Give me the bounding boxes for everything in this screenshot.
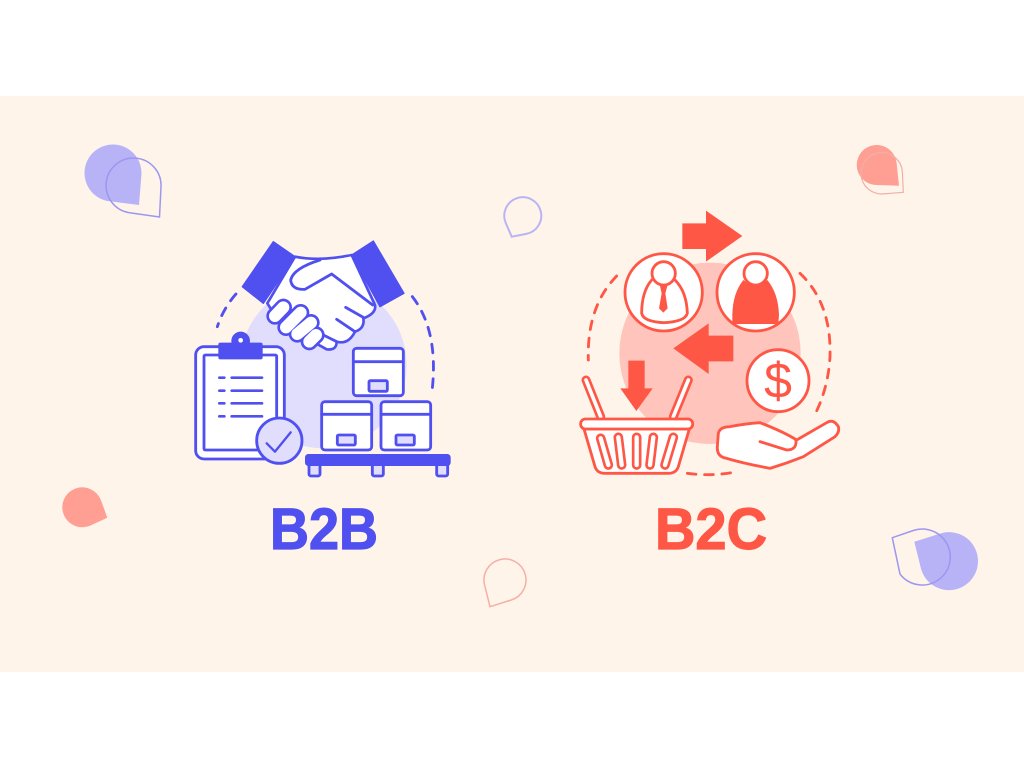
panel: B2B illustration bbox=[196, 241, 451, 476]
arrow: right bbox=[682, 211, 742, 262]
decorative drop: left bbox=[62, 487, 107, 527]
arrow: left bbox=[673, 323, 733, 374]
decorative drop: top centre bbox=[504, 197, 541, 237]
background circle bbox=[240, 282, 407, 448]
panel: B2C illustration bbox=[581, 211, 839, 475]
background band bbox=[0, 96, 1024, 672]
heading: B2C: B2C bbox=[655, 497, 767, 562]
background circle bbox=[619, 263, 801, 444]
icon: open hand bbox=[717, 421, 839, 468]
icon: dollar coin bbox=[747, 350, 809, 412]
icon: consumer bbox=[717, 254, 794, 331]
icon: basket bbox=[581, 380, 693, 473]
icon: bottom right box bbox=[381, 402, 431, 450]
dashed arcs bbox=[217, 294, 433, 388]
icon: check badge bbox=[257, 418, 302, 463]
icon: business person bbox=[625, 254, 702, 331]
heading: B2B: B2B bbox=[270, 497, 378, 562]
dashed arcs bbox=[588, 273, 830, 475]
icon: dollar coin: $ bbox=[764, 353, 792, 409]
decorative drops: bottom right bbox=[892, 529, 978, 590]
decorative drops: top left bbox=[84, 145, 161, 217]
decorative drops: top right bbox=[857, 145, 903, 194]
icon: top box bbox=[353, 348, 403, 396]
icon: pallet bbox=[305, 454, 451, 476]
icon: bottom left box bbox=[322, 402, 372, 450]
icon: clipboard bbox=[196, 332, 284, 459]
icon: handshake bbox=[242, 241, 404, 350]
decorative drop: bottom centre bbox=[484, 559, 526, 607]
arrow: down bbox=[620, 361, 653, 411]
